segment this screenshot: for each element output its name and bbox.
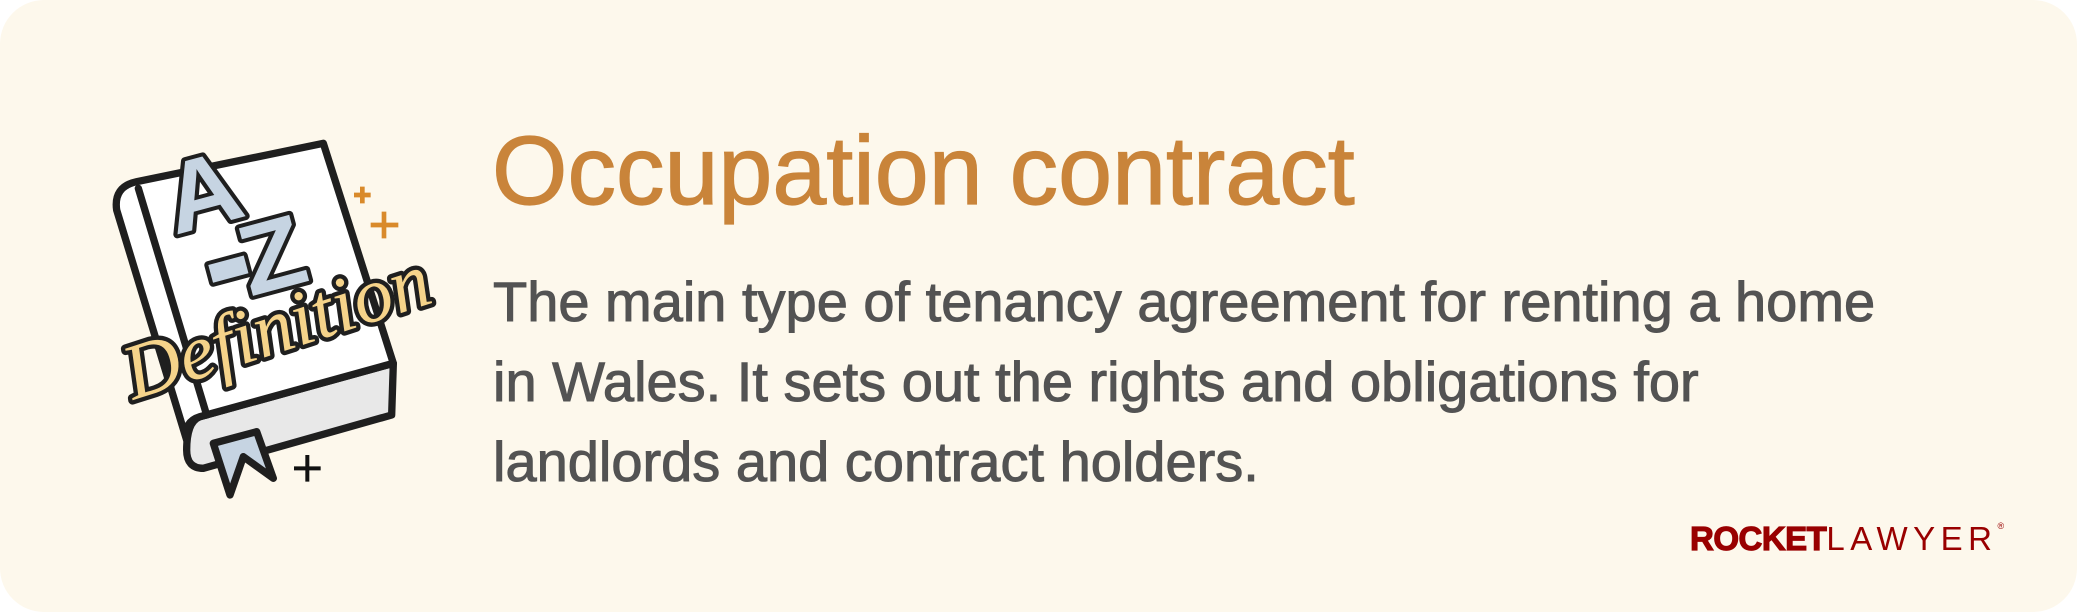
- logo: Rocket Lawyer: ROCKETLAWYER®: [1690, 520, 2004, 557]
- icon: A-Z definition book: [111, 128, 441, 499]
- icon: A-Z definition book: Z: [227, 192, 318, 317]
- title: Occupation contract: [492, 116, 1355, 225]
- icon: A-Z definition book: Definition: [111, 235, 441, 416]
- definition text: The main type of tenancy agreement for renting a home in Wales. It sets out the rights and obligations for landlords and contract holders.: [493, 270, 1875, 493]
- icon: A-Z definition book: A: [152, 128, 254, 256]
